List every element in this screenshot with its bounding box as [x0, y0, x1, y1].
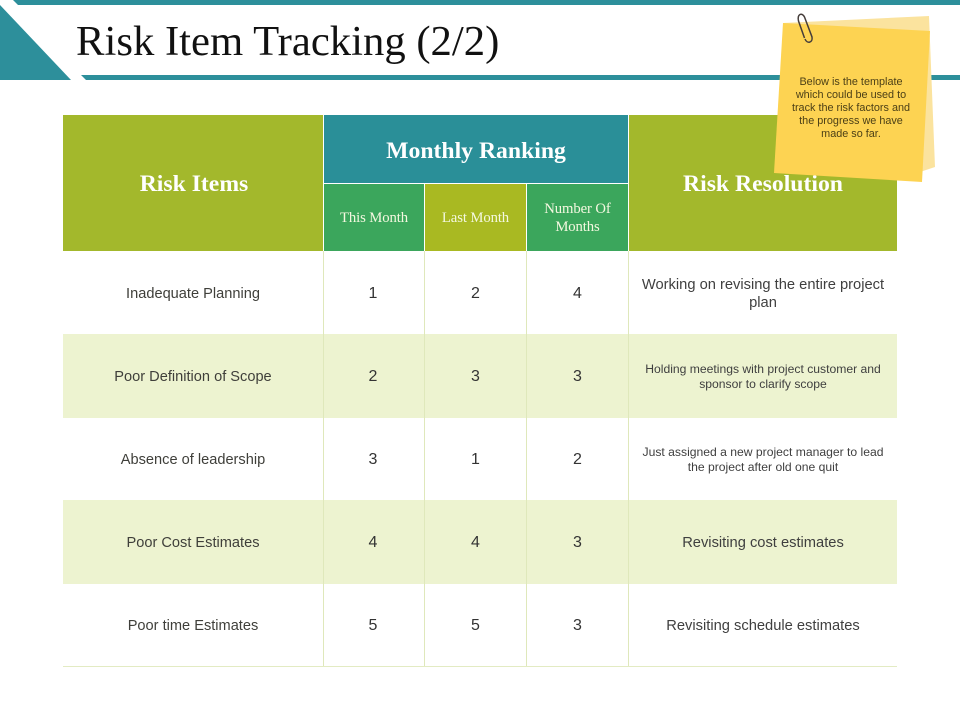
- sticky note text: Below is the template: [799, 76, 903, 88]
- row 2: Poor Definition of Scope: [114, 368, 272, 384]
- row 2: 3: [573, 368, 582, 384]
- row 5: 3: [573, 616, 582, 634]
- row 3: [120, 444, 883, 474]
- header: Last Month: [425, 184, 526, 251]
- header: This Month: This Month: [340, 210, 408, 226]
- row 2: sponsor to clarify scope: [699, 376, 827, 390]
- sticky note text: the progress we have: [799, 115, 903, 127]
- row 4: 4: [471, 534, 480, 550]
- row 5: Poor time Estimates: [128, 618, 258, 634]
- icon: paperclip: [798, 14, 812, 42]
- header: Number Of Months: [527, 184, 628, 251]
- row 2: [114, 362, 881, 390]
- corner teal triangle: [0, 5, 71, 80]
- row 4: Poor Cost Estimates: [126, 534, 260, 550]
- row 2: 2: [369, 368, 377, 384]
- sticky note text: [792, 76, 910, 140]
- note front sheet: [774, 23, 930, 182]
- row 1: 1: [369, 284, 377, 302]
- row 3: Absence of leadership: [121, 452, 265, 468]
- row 3: 1: [471, 450, 480, 468]
- row 3: 3: [369, 450, 377, 468]
- header: This Month: [324, 184, 424, 251]
- sticky note text: made so far.: [821, 128, 881, 140]
- row 3: the project after old one quit: [688, 460, 838, 474]
- header: Last Month: Last Month: [442, 210, 509, 226]
- row 3: Just assigned a new project manager to lead: [643, 444, 883, 458]
- row 5: 5: [471, 616, 480, 634]
- sticky note text: track the risk factors and: [792, 102, 910, 114]
- row 1: Inadequate Planning: [126, 286, 260, 302]
- header: Risk Resolution: [629, 115, 897, 251]
- header: Number Of Months: Number Of: [544, 201, 611, 217]
- row 3: 2: [573, 450, 582, 468]
- top teal bar: [0, 0, 960, 5]
- row 1: plan: [749, 294, 777, 310]
- row 1: 2: [471, 284, 480, 302]
- row 1: [126, 276, 884, 310]
- row 4: [126, 534, 844, 550]
- row 4: 3: [573, 534, 582, 550]
- sticky note: [774, 14, 935, 182]
- title underline bar: [81, 75, 960, 80]
- row 5: Revisiting schedule estimates: [666, 618, 860, 634]
- row 5: [128, 616, 860, 634]
- row 1: Working on revising the entire project: [642, 276, 884, 292]
- note back sheet: [783, 16, 935, 172]
- row 5: 5: [369, 616, 377, 634]
- row 4: Revisiting cost estimates: [682, 534, 844, 550]
- row 2: 3: [471, 368, 480, 384]
- row 1: 4: [573, 284, 582, 302]
- row 2: Holding meetings with project customer and: [645, 362, 881, 376]
- header: Monthly Ranking: Monthly Ranking: [386, 138, 566, 164]
- sticky note text: which could be used to: [796, 89, 906, 101]
- row 4: 4: [369, 534, 377, 550]
- header: Risk Resolution: Risk Resolution: [683, 171, 843, 197]
- title: Risk Item Tracking (2/2): [76, 18, 499, 65]
- header: Monthly Ranking: [324, 115, 628, 183]
- header: Risk Items: Risk Items: [140, 171, 248, 197]
- header: Number Of Months: Months: [555, 219, 600, 235]
- header: Risk Items: [63, 115, 325, 251]
